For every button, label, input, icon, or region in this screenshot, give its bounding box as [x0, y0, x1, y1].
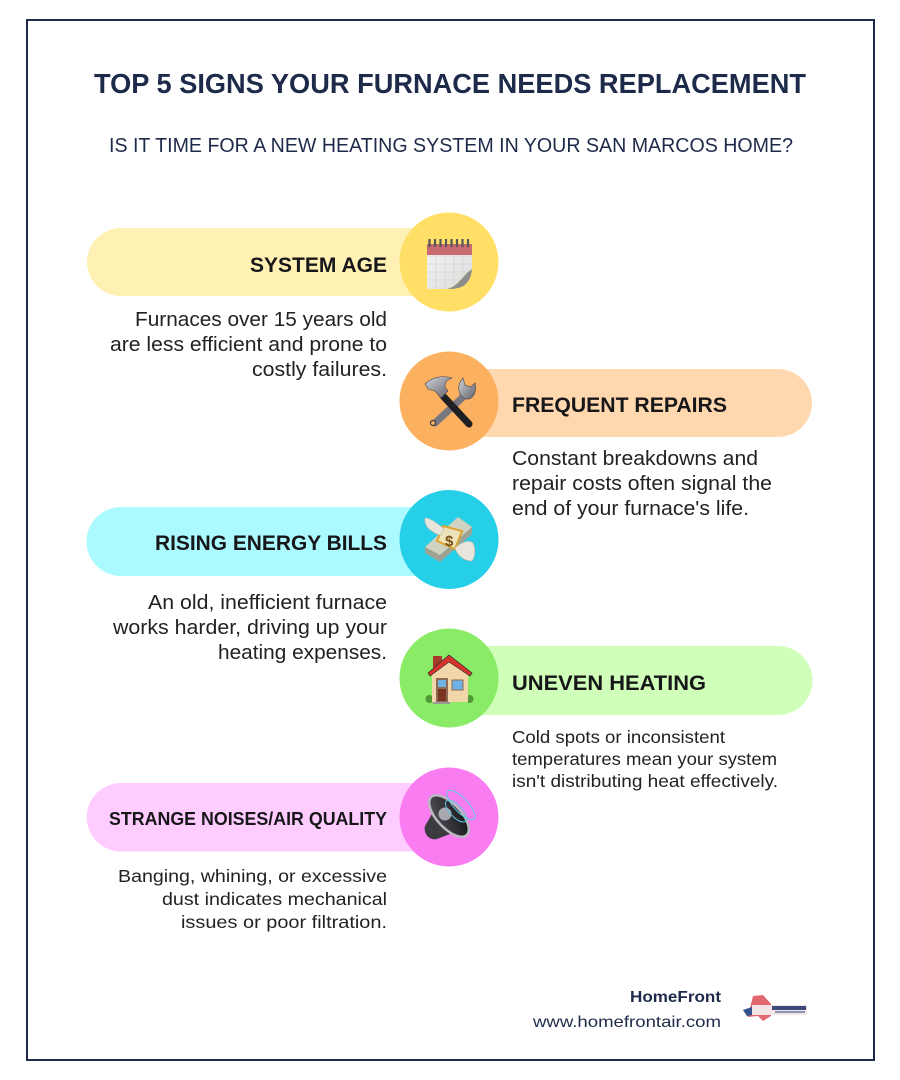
title: TOP 5 SIGNS YOUR FURNACE NEEDS REPLACEMENT: [94, 68, 806, 99]
footer brand: www.homefrontair.com: [532, 1014, 721, 1031]
pill: system age: [87, 228, 449, 296]
description: rising energy bills: works harder, driving up your: [112, 617, 387, 639]
heading: rising energy bills: RISING ENERGY BILLS: [155, 532, 387, 555]
description: system age: Furnaces over 15 years old: [135, 309, 387, 331]
heading: uneven heating: UNEVEN HEATING: [512, 672, 706, 695]
panel: uneven heating: [400, 628, 813, 791]
icon: hammer and wrench: [425, 377, 476, 426]
description: strange noises: Banging, whining, or excessive: [118, 866, 387, 886]
icon: speaker: [422, 786, 479, 843]
pill: strange noises: [87, 783, 449, 852]
icon circle: yellow: [400, 212, 498, 312]
icon circle: orange: [400, 352, 498, 450]
icon: money with wings: $: [445, 533, 454, 550]
logo: [743, 995, 807, 1021]
heading: system age: SYSTEM AGE: [250, 254, 387, 277]
description: frequent repairs: repair costs often signal the: [512, 473, 772, 495]
description: strange noises: [118, 866, 387, 932]
description: rising energy bills: An old, inefficient furnace: [148, 592, 387, 614]
icon circle: pink: [400, 768, 498, 866]
description: strange noises: issues or poor filtration.: [181, 912, 387, 932]
pill: uneven heating: [449, 646, 813, 715]
icon: house: [426, 655, 474, 704]
heading: frequent repairs: FREQUENT REPAIRS: [512, 394, 727, 417]
icon circle: green: [400, 628, 498, 728]
subtitle: IS IT TIME FOR A NEW HEATING SYSTEM IN YOUR SAN MARCOS HOME?: [109, 135, 793, 157]
panel: system age: [87, 212, 499, 381]
description: frequent repairs: end of your furnace's life.: [512, 498, 749, 520]
panel: strange noises: [87, 768, 498, 932]
description: rising energy bills: heating expenses.: [218, 642, 387, 664]
description: system age: are less efficient and prone to: [110, 334, 387, 356]
heading: strange noises: STRANGE NOISES/AIR QUALITY: [109, 809, 387, 829]
icon circle: cyan: [400, 490, 498, 589]
description: strange noises: dust indicates mechanical: [162, 889, 387, 909]
description: uneven heating: isn't distributing heat effectively.: [512, 771, 778, 791]
icon: money with wings: [425, 517, 475, 562]
description: uneven heating: [512, 727, 778, 791]
description: system age: costly failures.: [252, 359, 387, 381]
pill: rising energy bills: [87, 507, 449, 576]
description: frequent repairs: [512, 448, 772, 520]
description: system age: [110, 309, 387, 381]
panel: rising energy bills: [87, 490, 499, 664]
description: uneven heating: temperatures mean your system: [512, 749, 777, 769]
pill: frequent repairs: [449, 369, 812, 437]
description: uneven heating: Cold spots or inconsistent: [512, 727, 725, 747]
panel: frequent repairs: [400, 352, 812, 520]
description: rising energy bills: [112, 592, 387, 664]
footer brand: HomeFront: [630, 989, 722, 1006]
footer brand: [532, 989, 722, 1031]
icon: calendar: [427, 239, 472, 289]
description: frequent repairs: Constant breakdowns and: [512, 448, 758, 470]
